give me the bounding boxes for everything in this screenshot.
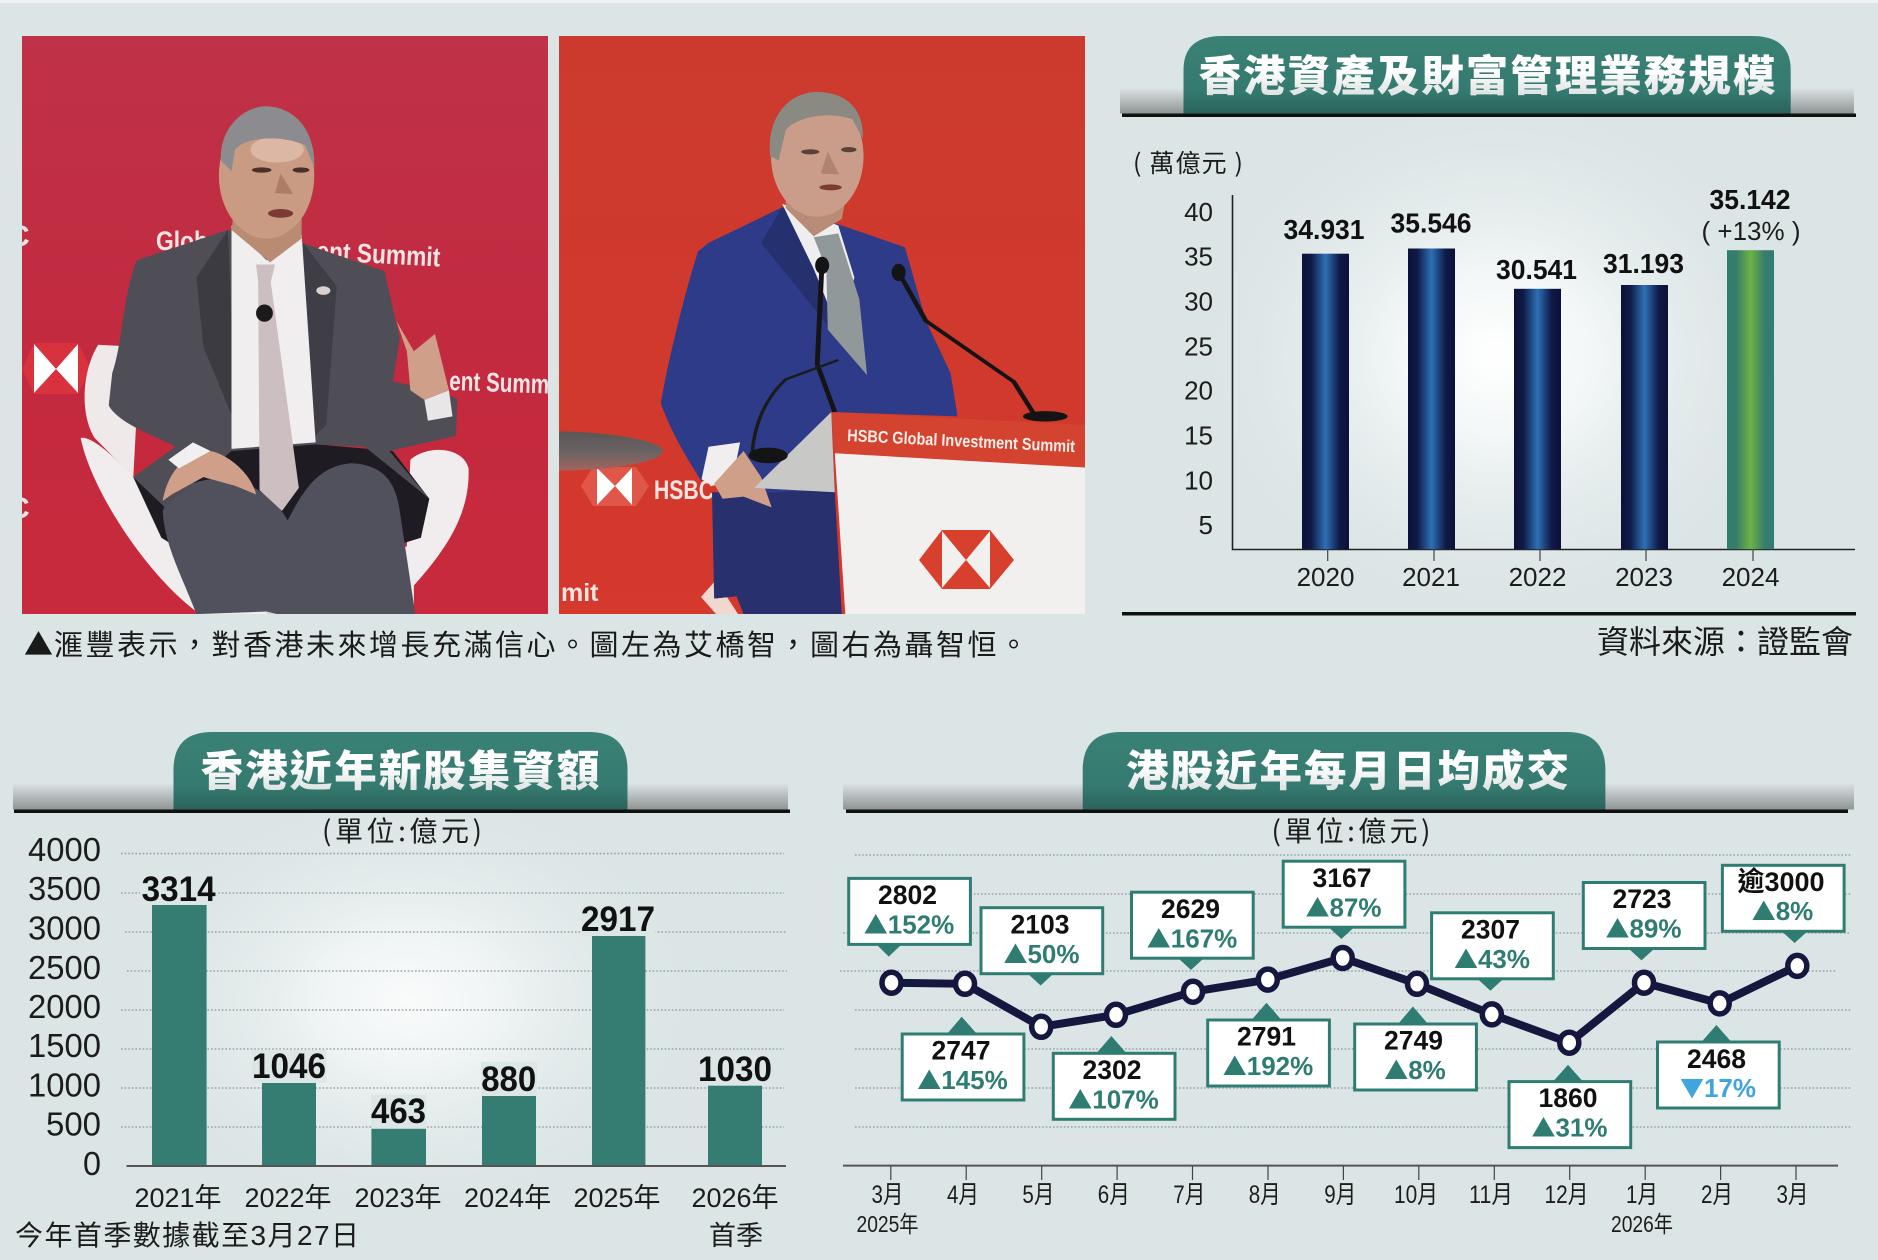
y axis labels: 25 bbox=[1184, 332, 1213, 362]
chart axes bbox=[1232, 195, 1855, 550]
callout: 2791: ▲192% bbox=[1223, 1047, 1313, 1082]
x axis months: 5月 bbox=[1022, 1181, 1054, 1209]
x axis years bbox=[1297, 562, 1779, 592]
bar values: 35.142 bbox=[1710, 184, 1790, 215]
heading band bbox=[1120, 87, 1854, 114]
y axis labels: 3000 bbox=[28, 910, 101, 946]
y axis labels: 35 bbox=[1184, 242, 1213, 272]
callout: 2747: 2747 bbox=[932, 1036, 990, 1066]
x axis months: 8月 bbox=[1249, 1181, 1281, 1209]
bar values bbox=[142, 870, 772, 1131]
panel: monthly average daily turnover bbox=[840, 732, 1854, 1237]
callout: 2723: 2723 bbox=[1612, 884, 1672, 914]
x axis years bbox=[134, 1183, 779, 1251]
bar values: 1030 bbox=[698, 1050, 772, 1089]
grid lines bbox=[840, 855, 1851, 1127]
photo: right speaker at podium: mit bbox=[561, 579, 599, 607]
unit label: (單位:億元) bbox=[1272, 810, 1430, 850]
photo caption: 滙豐表示，對香港未來增長充滿信心。圖左為艾橋智，圖右為聶智恒。 bbox=[54, 622, 1031, 664]
photo: left speaker seated: ent Summit bbox=[316, 236, 441, 272]
x axis years: 2025年 bbox=[573, 1183, 661, 1213]
line chart bbox=[892, 958, 1797, 1043]
x axis years: 首季 bbox=[709, 1221, 763, 1251]
bars bbox=[152, 905, 762, 1166]
bars bbox=[1302, 248, 1774, 549]
x axis months: 6月 bbox=[1098, 1181, 1130, 1209]
photo: left speaker seated: Glob bbox=[156, 226, 208, 256]
x axis years: 2020 bbox=[1297, 562, 1354, 592]
y axis labels: 4000 bbox=[28, 831, 101, 868]
heading band bbox=[13, 782, 788, 810]
line markers bbox=[882, 948, 1807, 1053]
x axis months: 7月 bbox=[1173, 1181, 1205, 1209]
x axis months: 12月 bbox=[1544, 1181, 1588, 1209]
x axis months: 4月 bbox=[947, 1181, 979, 1209]
callout: over 3000: ▲8% bbox=[1752, 892, 1813, 927]
callout: over 3000 bbox=[1722, 865, 1844, 943]
bar values: 31.193 bbox=[1603, 248, 1684, 279]
unit label: (單位:億元) bbox=[322, 810, 482, 850]
photo: right speaker at podium: HSBC bbox=[654, 475, 714, 505]
y axis labels bbox=[28, 831, 101, 1182]
callout: 2302 bbox=[1053, 1036, 1175, 1119]
x axis years: 2021年 bbox=[134, 1183, 222, 1213]
x axis year labels bbox=[856, 1211, 1673, 1237]
y axis labels: 1500 bbox=[28, 1027, 101, 1064]
bar values: 2917 bbox=[581, 900, 655, 939]
callout: 2307: ▲43% bbox=[1454, 940, 1530, 975]
callout: 2747 bbox=[902, 1017, 1024, 1100]
callout: 1860 bbox=[1509, 1065, 1631, 1148]
callout: 2468 bbox=[1658, 1025, 1779, 1108]
x axis years: 2022 bbox=[1509, 562, 1566, 592]
bar values: ( +13% ) bbox=[1702, 216, 1800, 246]
callout: 2629: ▲167% bbox=[1147, 920, 1237, 954]
y axis labels: 2500 bbox=[28, 949, 101, 986]
callout: 2802: ▲152% bbox=[864, 906, 954, 940]
callout: 2468: ▼17% bbox=[1680, 1069, 1756, 1104]
y axis labels: 40 bbox=[1184, 197, 1213, 227]
callout: 2749: ▲8% bbox=[1384, 1051, 1446, 1086]
x axis years: 2021 bbox=[1402, 562, 1460, 592]
y axis labels: 1000 bbox=[28, 1066, 101, 1104]
x axis years: 2023 bbox=[1615, 562, 1673, 592]
chart glow bbox=[1187, 85, 1807, 625]
y axis labels: 5 bbox=[1199, 510, 1213, 540]
callout: 2629: 2629 bbox=[1161, 894, 1220, 924]
x axis months: 3月 bbox=[1776, 1181, 1808, 1209]
callout: 2103: ▲50% bbox=[1003, 935, 1080, 970]
callout: 3167: 3167 bbox=[1312, 863, 1372, 893]
x axis years: 2023年 bbox=[354, 1183, 442, 1213]
y axis labels: 2000 bbox=[28, 988, 101, 1025]
callout: 2791 bbox=[1208, 1003, 1329, 1086]
unit label: ( 萬億元 ) bbox=[1133, 144, 1243, 180]
x axis months: 11月 bbox=[1469, 1181, 1513, 1209]
y axis labels: 10 bbox=[1184, 466, 1213, 496]
heading tab bbox=[174, 732, 628, 810]
photo: left speaker seated bbox=[8, 36, 550, 614]
callout: 2723 bbox=[1583, 882, 1705, 960]
heading text: 香港近年新股集資額 bbox=[201, 738, 601, 799]
callout: 2103: 2103 bbox=[1010, 910, 1070, 940]
x axis years: 2022年 bbox=[244, 1183, 332, 1213]
x axis year labels: 2025年 bbox=[856, 1211, 918, 1237]
y axis labels: 3500 bbox=[28, 870, 101, 907]
y axis labels: 20 bbox=[1184, 376, 1213, 406]
x axis months: 2月 bbox=[1701, 1181, 1733, 1209]
callout: 2791: 2791 bbox=[1237, 1022, 1296, 1052]
x axis years: 2024 bbox=[1722, 562, 1779, 592]
callout: 2629 bbox=[1132, 892, 1253, 970]
photo: left speaker seated: C bbox=[8, 220, 30, 253]
chart glow bbox=[110, 780, 710, 1220]
bar values bbox=[1284, 184, 1800, 285]
bar values: 1046 bbox=[252, 1047, 326, 1086]
x axis months: 9月 bbox=[1324, 1181, 1356, 1209]
heading text: 香港資產及財富管理業務規模 bbox=[1199, 43, 1777, 104]
footnote: 今年首季數據截至3月27日 bbox=[15, 1220, 359, 1251]
heading band bbox=[843, 782, 1854, 810]
bar values: 34.931 bbox=[1284, 214, 1364, 245]
callout: 1860: 1860 bbox=[1538, 1083, 1598, 1113]
heading text: 港股近年每月日均成交 bbox=[1126, 738, 1571, 799]
photo: right speaker at podium: HSBC Global Investment Summit bbox=[847, 426, 1076, 456]
grid lines bbox=[121, 854, 787, 1127]
y axis labels: 15 bbox=[1184, 420, 1213, 450]
photo: left speaker seated: ent Summ bbox=[449, 366, 550, 399]
callout: 2802: 2802 bbox=[878, 880, 937, 910]
x axis months bbox=[872, 1181, 1808, 1209]
x axis years: 2026年 bbox=[691, 1183, 779, 1213]
callout: 2749: 2749 bbox=[1384, 1026, 1443, 1056]
callout: 3167: ▲87% bbox=[1305, 888, 1382, 924]
heading tab bbox=[1083, 732, 1605, 810]
callout: 1860: ▲31% bbox=[1531, 1108, 1608, 1144]
callout: 2307 bbox=[1432, 913, 1553, 991]
callout: 2747: ▲145% bbox=[917, 1061, 1008, 1096]
y axis labels: 500 bbox=[46, 1106, 101, 1142]
photo caption: ▲ bbox=[24, 622, 56, 664]
x axis months: 1月 bbox=[1626, 1181, 1658, 1209]
y axis labels: 30 bbox=[1184, 286, 1213, 316]
callout: 2307: 2307 bbox=[1461, 914, 1520, 944]
bar values: 3314 bbox=[142, 870, 216, 909]
callout: 2749 bbox=[1355, 1006, 1476, 1090]
callout: 2802 bbox=[849, 878, 970, 957]
bar values: 463 bbox=[371, 1092, 426, 1131]
panel: new share fundraising bbox=[13, 732, 790, 1251]
y axis labels bbox=[1184, 197, 1213, 540]
callout: 2302: 2302 bbox=[1082, 1055, 1142, 1085]
value label backings bbox=[140, 872, 771, 1129]
source note: 資料來源：證監會 bbox=[1597, 617, 1853, 663]
heading tab bbox=[1184, 36, 1791, 114]
panel: assets and wealth management bbox=[1120, 36, 1856, 663]
callout: 2103 bbox=[981, 908, 1103, 986]
bar values: 35.546 bbox=[1390, 208, 1472, 238]
x axis years: 2024年 bbox=[464, 1183, 551, 1213]
x axis months: 10月 bbox=[1394, 1181, 1438, 1209]
callout: 2302: ▲107% bbox=[1068, 1080, 1159, 1116]
bar values: 880 bbox=[481, 1060, 536, 1099]
y axis labels: 0 bbox=[83, 1145, 101, 1182]
x axis year labels: 2026年 bbox=[1611, 1211, 1673, 1237]
callout: over 3000: 逾3000 bbox=[1737, 866, 1825, 897]
callout: 2468: 2468 bbox=[1687, 1044, 1746, 1074]
callout: 2723: ▲89% bbox=[1605, 910, 1682, 944]
photo: left speaker seated: C bbox=[8, 492, 30, 525]
x axis months: 3月 bbox=[872, 1181, 904, 1209]
bar values: 30.541 bbox=[1496, 254, 1577, 285]
photo: right speaker at podium bbox=[559, 36, 1085, 614]
x axis bbox=[843, 1165, 1838, 1167]
callout: 3167 bbox=[1283, 861, 1405, 939]
